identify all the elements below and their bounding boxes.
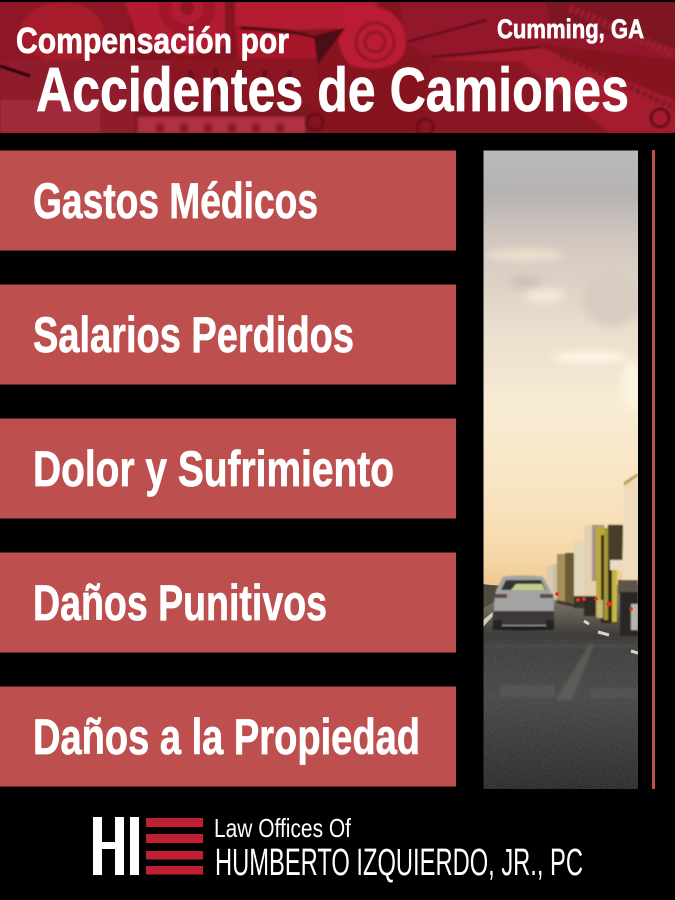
architectural column background <box>0 0 675 135</box>
panel: Gastos Médicos <box>0 150 456 250</box>
panel: Daños a la Propiedad <box>0 686 456 786</box>
logo mark: red bars <box>146 818 203 874</box>
panel: Daños a la Propiedad: Daños a la Propiedad <box>33 709 420 765</box>
panel: Salarios Perdidos: Salarios Perdidos <box>33 307 354 363</box>
car <box>491 576 555 630</box>
location: Cumming, GA: Cumming, GA <box>497 14 644 44</box>
lane dashes <box>584 621 638 653</box>
logo mark: HI letters <box>93 817 139 875</box>
sky <box>483 150 642 590</box>
road grain <box>483 640 638 790</box>
panel: Gastos Médicos: Gastos Médicos <box>33 173 318 229</box>
panel: Salarios Perdidos <box>0 284 456 384</box>
footer logo: Law Offices Of Humberto Izquierdo <box>93 813 583 884</box>
header banner <box>0 0 675 135</box>
road wear marks <box>500 644 636 700</box>
panel: Dolor y Sufrimiento <box>0 418 456 518</box>
truck convoy <box>547 473 638 636</box>
road <box>483 585 638 790</box>
truck tail lights <box>555 592 633 611</box>
panel: Daños Punitivos <box>0 552 456 652</box>
vertical accent line <box>652 150 655 789</box>
panel: Daños Punitivos: Daños Punitivos <box>33 575 327 631</box>
firm name line one: Law Offices Of <box>214 813 352 843</box>
photo: truck queue on highway at sunset <box>483 150 642 790</box>
panel: Dolor y Sufrimiento: Dolor y Sufrimiento <box>33 441 394 497</box>
roadside verge <box>483 584 498 608</box>
heading: Compensación por: Compensación por <box>16 20 289 61</box>
